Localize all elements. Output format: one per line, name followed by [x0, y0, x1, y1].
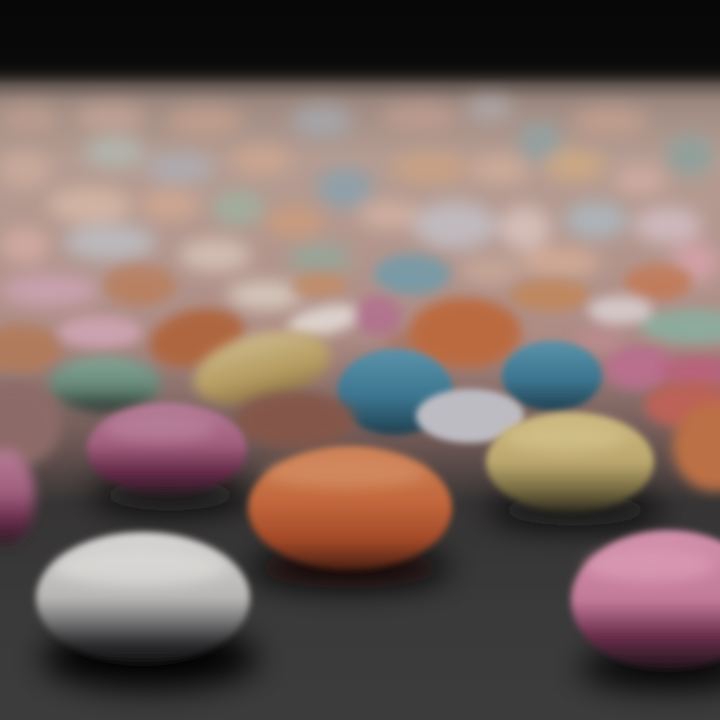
near-mid pill: blue [337, 349, 453, 435]
near-mid pill: blue right [502, 341, 602, 411]
right pill: orange [673, 403, 720, 491]
near-mid pill: green [49, 356, 161, 412]
pill: yellow foreground [486, 412, 654, 512]
pill: white foreground [36, 532, 250, 664]
mid pills: soft colored row [0, 254, 720, 390]
near-mid pill: white [416, 389, 524, 443]
pill: orange foreground [248, 446, 452, 570]
top vignette [0, 0, 720, 84]
pill: left edge magenta [0, 449, 35, 545]
near-mid pill: orange center [409, 298, 521, 368]
shadows under foreground pills [42, 479, 720, 688]
pill: pink [87, 403, 247, 495]
near-mid pill: yellow [186, 318, 338, 418]
near-mid pill: brownish red [235, 392, 355, 448]
near-mid pill: orange [144, 301, 250, 375]
right pill: red [644, 381, 720, 429]
left edge pill: faded rose [0, 383, 61, 467]
distant pills: dense blurred field [0, 98, 720, 309]
haze: softens the far field [0, 75, 720, 350]
pill: pink foreground right [571, 530, 720, 670]
